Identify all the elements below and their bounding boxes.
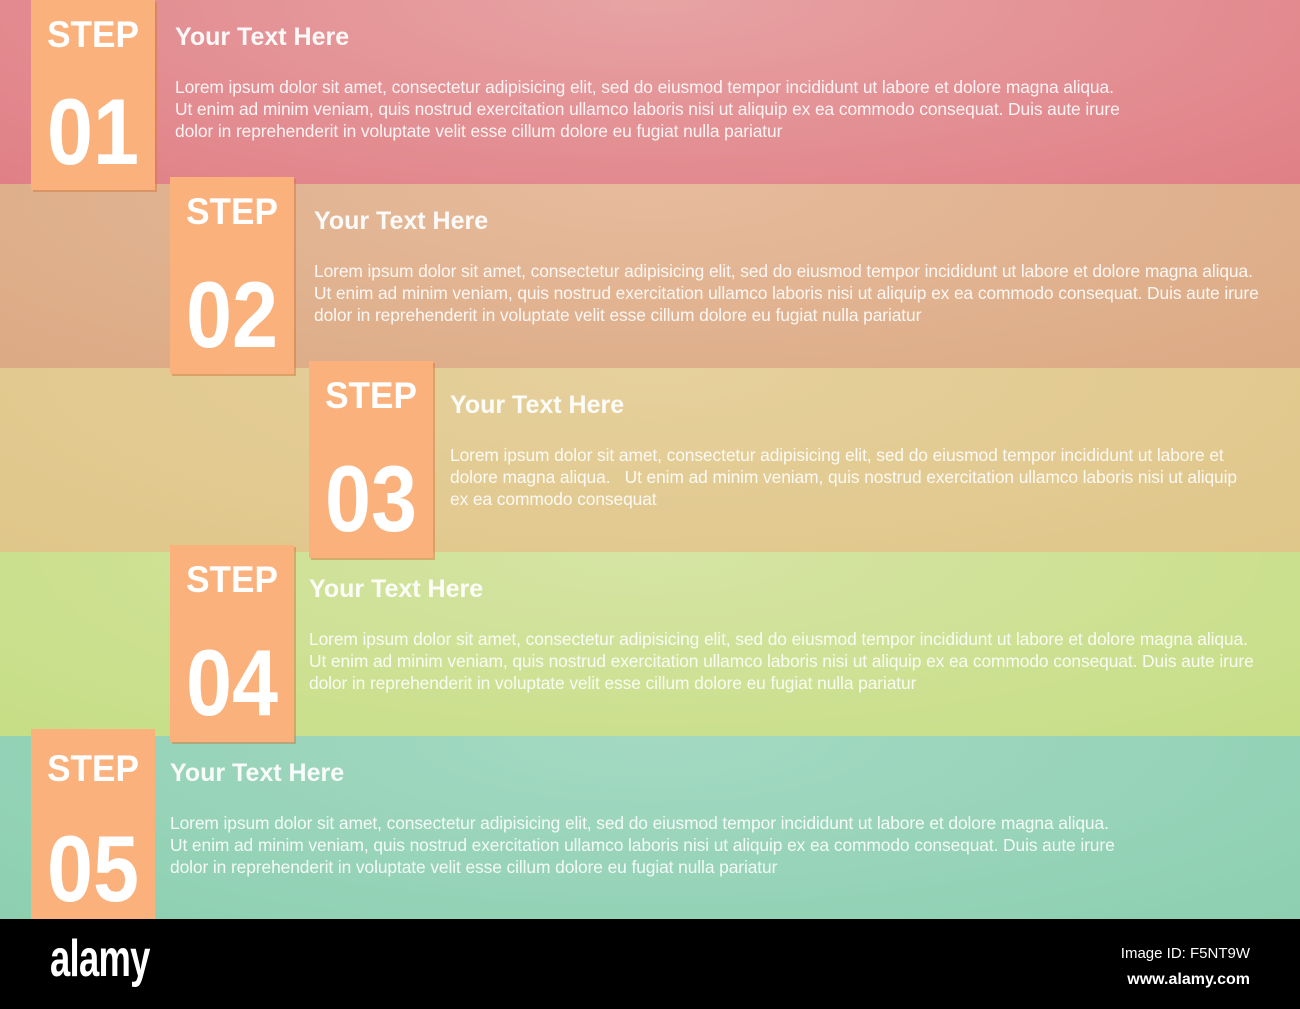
step box 5: STEP [47,748,139,789]
footer image id: Image ID: F5NT9W [1121,945,1250,962]
step box 2: STEP [186,191,278,232]
footer image id [1121,945,1250,988]
text block 5: dolor in reprehenderit in voluptate velit esse cillum dolore eu fugiat nulla pariatur [170,857,777,877]
band 1 [0,0,1300,184]
text block 4 [309,575,1254,693]
step box 2 [170,177,294,374]
footer bar [0,919,1300,1009]
text block 2: dolor in reprehenderit in voluptate velit esse cillum dolore eu fugiat nulla pariatur [314,305,921,325]
text block 4: dolor in reprehenderit in voluptate velit esse cillum dolore eu fugiat nulla pariatur [309,673,916,693]
text block 3: Your Text Here [450,391,624,419]
text block 2 [314,207,1259,325]
text block 1: Ut enim ad minim veniam, quis nostrud exercitation ullamco laboris nisi ut aliquip ex ea commodo consequat. Duis aute irure [175,99,1120,119]
step box 5: 05 [47,816,139,921]
text block 1 [175,23,1120,141]
band 4 [0,552,1300,736]
step box 1: STEP [47,14,139,55]
step box 4 [170,545,294,742]
text block 2: Lorem ipsum dolor sit amet, consectetur adipisicing elit, sed do eiusmod tempor incididunt ut labore et dolore magna aliqua. [314,261,1253,281]
text block 1: Your Text Here [175,23,349,51]
text block 5: Your Text Here [170,759,344,787]
text block 5: Ut enim ad minim veniam, quis nostrud exercitation ullamco laboris nisi ut aliquip ex ea commodo consequat. Duis aute irure [170,835,1115,855]
step box 1 [31,0,155,190]
text block 5: Lorem ipsum dolor sit amet, consectetur adipisicing elit, sed do eiusmod tempor incididunt ut labore et dolore magna aliqua. [170,813,1109,833]
text block 2: Ut enim ad minim veniam, quis nostrud exercitation ullamco laboris nisi ut aliquip ex ea commodo consequat. Duis aute irure [314,283,1259,303]
text block 5 [170,759,1115,877]
step box 3 [309,361,433,558]
text block 3: ex ea commodo consequat [450,489,657,509]
step box 2: 02 [186,262,278,367]
step box 3: STEP [325,375,417,416]
text block 4: Ut enim ad minim veniam, quis nostrud exercitation ullamco laboris nisi ut aliquip ex ea commodo consequat. Duis aute irure [309,651,1254,671]
step box 1: 01 [47,79,139,184]
text block 4: Your Text Here [309,575,483,603]
step box 3: 03 [325,446,417,551]
text block 3: dolore magna aliqua. Ut enim ad minim veniam, quis nostrud exercitation ullamco laboris nisi ut aliquip [450,467,1237,487]
text block 2: Your Text Here [314,207,488,235]
footer logo: alamy [50,930,150,988]
text block 1: dolor in reprehenderit in voluptate velit esse cillum dolore eu fugiat nulla pariatur [175,121,782,141]
text block 3: Lorem ipsum dolor sit amet, consectetur adipisicing elit, sed do eiusmod tempor incididunt ut labore et [450,445,1224,465]
band 3 [0,368,1300,552]
step box 4: 04 [186,630,278,735]
step box 5 [31,729,155,919]
text block 4: Lorem ipsum dolor sit amet, consectetur adipisicing elit, sed do eiusmod tempor incididunt ut labore et dolore magna aliqua. [309,629,1248,649]
footer image id: www.alamy.com [1127,971,1250,988]
band 5 [0,736,1300,919]
step box 4: STEP [186,559,278,600]
text block 3 [450,391,1237,509]
text block 1: Lorem ipsum dolor sit amet, consectetur adipisicing elit, sed do eiusmod tempor incididunt ut labore et dolore magna aliqua. [175,77,1114,97]
band 2 [0,184,1300,368]
